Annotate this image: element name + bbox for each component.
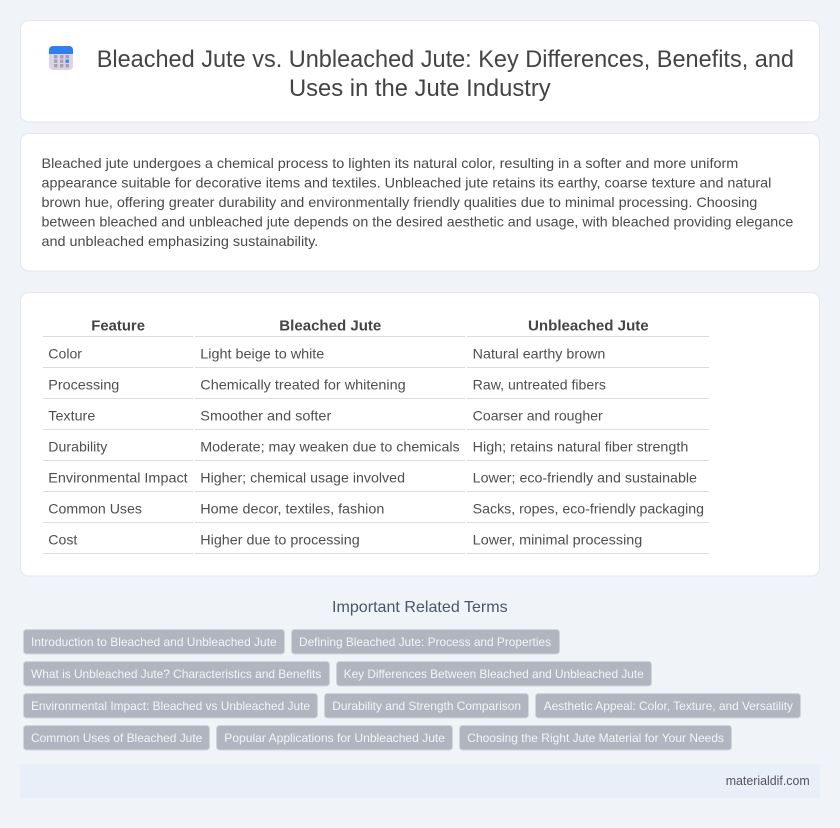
text block: description: appearance suitable for decorative items and textiles. Unbleached jute retains its earthy, coarse texture and natural xyxy=(42,174,771,190)
tag xyxy=(24,726,210,750)
panel: related term tags xyxy=(24,630,800,750)
tag: Introduction to Bleached and Unbleached Jute xyxy=(31,635,277,649)
text block: description: and unbleached emphasizing sustainability. xyxy=(42,233,318,249)
tag: Key Differences Between Bleached and Unbleached Jute xyxy=(344,667,644,681)
title: Uses in the Jute Industry xyxy=(289,75,551,102)
text block: description: Bleached jute undergoes a chemical process to lighten its natural color, resulting in a softer and more uniform xyxy=(42,155,738,171)
row: durability: High; retains natural fiber strength xyxy=(473,438,688,454)
icon: calendar xyxy=(49,46,73,70)
row: environmental impact: Lower; eco-friendly and sustainable xyxy=(473,469,697,485)
row: color xyxy=(43,345,709,368)
tag: Popular Applications for Unbleached Jute xyxy=(224,731,445,745)
tag: Aesthetic Appeal: Color, Texture, and Versatility xyxy=(544,699,793,713)
row: environmental impact: Environmental Impact xyxy=(48,469,188,485)
heading: important related terms: Important Related Terms xyxy=(332,599,508,616)
tag: Environmental Impact: Bleached vs Unbleached Jute xyxy=(31,699,310,713)
tag xyxy=(216,726,452,750)
table header: Bleached Jute xyxy=(279,318,381,334)
table header xyxy=(43,318,709,337)
row: durability: Moderate; may weaken due to chemicals xyxy=(200,438,460,454)
tag: What is Unbleached Jute? Characteristics and Benefits xyxy=(31,667,321,681)
row: texture xyxy=(43,407,709,430)
row: durability: Durability xyxy=(48,438,107,454)
row: texture: Smoother and softer xyxy=(200,407,332,423)
tag xyxy=(336,662,652,686)
row: color: Color xyxy=(48,345,82,361)
row: common uses: Common Uses xyxy=(48,500,142,516)
tag: Defining Bleached Jute: Process and Properties xyxy=(299,635,551,649)
row: durability xyxy=(43,438,709,461)
row: common uses: Sacks, ropes, eco-friendly packaging xyxy=(473,500,704,516)
tag xyxy=(324,694,528,718)
row: color: Natural earthy brown xyxy=(473,345,605,361)
row: texture: Coarser and rougher xyxy=(473,407,603,423)
row: cost: Lower, minimal processing xyxy=(473,531,642,547)
row: cost: Higher due to processing xyxy=(200,531,360,547)
tag xyxy=(24,630,284,654)
row: processing xyxy=(43,376,709,399)
tag xyxy=(536,694,800,718)
row: common uses xyxy=(43,500,709,523)
text block: description: between bleached and unbleached jute depends on the desired aesthetic and usage, with bleached providing elegance xyxy=(42,214,794,230)
tag xyxy=(292,630,560,654)
panel: introduction xyxy=(20,134,820,271)
row: processing: Raw, untreated fibers xyxy=(473,376,606,392)
row: cost xyxy=(43,531,709,554)
row: environmental impact: Higher; chemical usage involved xyxy=(200,469,405,485)
row: color: Light beige to white xyxy=(200,345,325,361)
tag xyxy=(24,662,330,686)
title xyxy=(97,46,794,102)
tag: Common Uses of Bleached Jute xyxy=(31,731,203,745)
tag: Durability and Strength Comparison xyxy=(332,699,521,713)
row: processing: Processing xyxy=(48,376,119,392)
title: Bleached Jute vs. Unbleached Jute: Key Differences, Benefits, and xyxy=(97,46,794,73)
text block: description xyxy=(42,155,794,249)
row: cost: Cost xyxy=(48,531,77,547)
tag xyxy=(24,694,318,718)
row: common uses: Home decor, textiles, fashion xyxy=(200,500,384,516)
table header: Feature xyxy=(91,318,145,334)
panel: comparison table xyxy=(20,292,820,576)
panel: title header xyxy=(20,20,820,122)
tag xyxy=(460,726,732,750)
row: processing: Chemically treated for whitening xyxy=(200,376,406,392)
text block: description: brown hue, offering greater durability and environmentally friendly qualities due to minimal processing. Choosing xyxy=(42,194,757,210)
footer xyxy=(20,764,820,798)
row: environmental impact xyxy=(43,469,709,492)
row: texture: Texture xyxy=(48,407,96,423)
table header: Unbleached Jute xyxy=(528,318,649,334)
tag: Choosing the Right Jute Material for Your Needs xyxy=(467,731,724,745)
footer: materialdif.com xyxy=(726,774,810,788)
